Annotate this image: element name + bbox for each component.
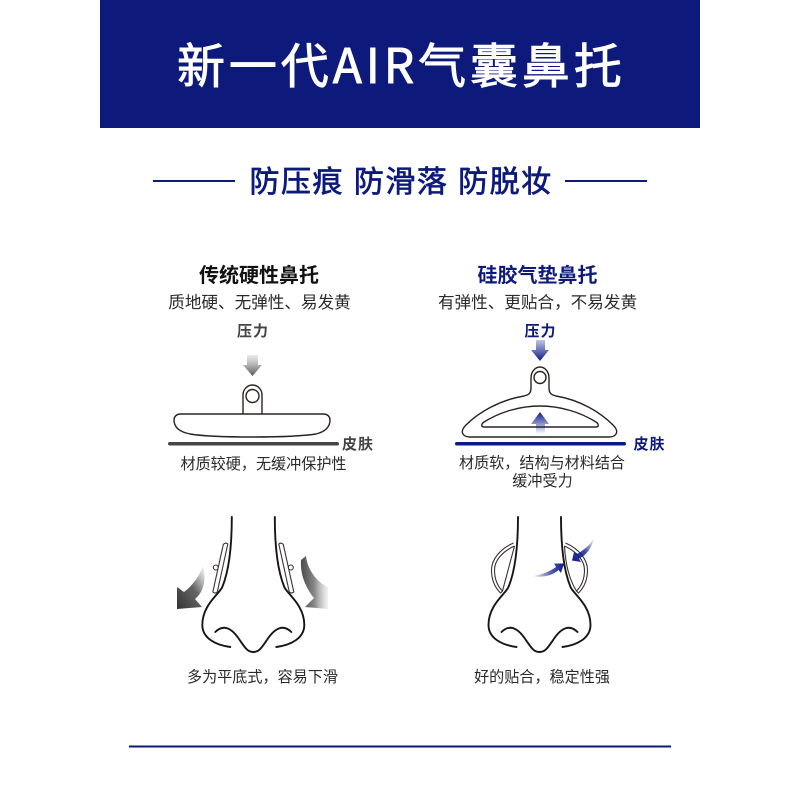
caption: good fit: 好的贴合，稳定性强 <box>474 669 610 686</box>
skin line: traditional <box>168 442 339 446</box>
icon: left slip arrow <box>177 566 205 609</box>
caption: hard material: 材质较硬，无缓冲保护性 <box>180 455 347 473</box>
pressure label: traditional: 压力 <box>237 323 269 340</box>
icon: blue upper press arrow <box>572 538 594 562</box>
heading: traditional: 传统硬性鼻托 <box>199 263 319 287</box>
diagram: nose with flat pads <box>202 517 304 652</box>
diagram: air cushion pad <box>462 367 617 437</box>
description: silicone: 有弹性、更贴合，不易发黄 <box>438 293 637 312</box>
decorative bottom line <box>129 746 671 748</box>
icon: grey pressure arrow <box>243 355 262 376</box>
icon: blue pressure arrow <box>531 340 549 361</box>
skin label: traditional: 皮肤 <box>342 435 374 453</box>
caption: cushioning: 缓冲受力 <box>512 473 573 490</box>
heading: silicone: 硅胶气垫鼻托 <box>478 263 598 287</box>
skin line: silicone <box>455 442 626 446</box>
title: 新一代AIR气囊鼻托 <box>177 27 626 97</box>
panel: silicone air cushion nose pad <box>438 263 666 686</box>
description: traditional: 质地硬、无弹性、易发黄 <box>168 293 351 312</box>
subtitle with side rules: 防压痕 防滑落 防脱妆 <box>250 166 553 199</box>
caption: slides down: 多为平底式，容易下滑 <box>187 669 338 686</box>
diagram: nose with air cushion pads <box>488 517 590 652</box>
icon: right slip arrow <box>301 556 328 609</box>
panel: traditional hard nose pad <box>168 263 374 686</box>
icon: blue lower press arrow <box>532 564 564 577</box>
skin label: silicone: 皮肤 <box>633 435 666 453</box>
diagram: hard nose pad <box>174 385 330 437</box>
caption: soft material: 材质软，结构与材料结合 <box>459 455 625 472</box>
header banner <box>100 0 700 128</box>
pressure label: silicone: 压力 <box>524 323 557 340</box>
icon: blue upward arrow <box>531 412 549 434</box>
